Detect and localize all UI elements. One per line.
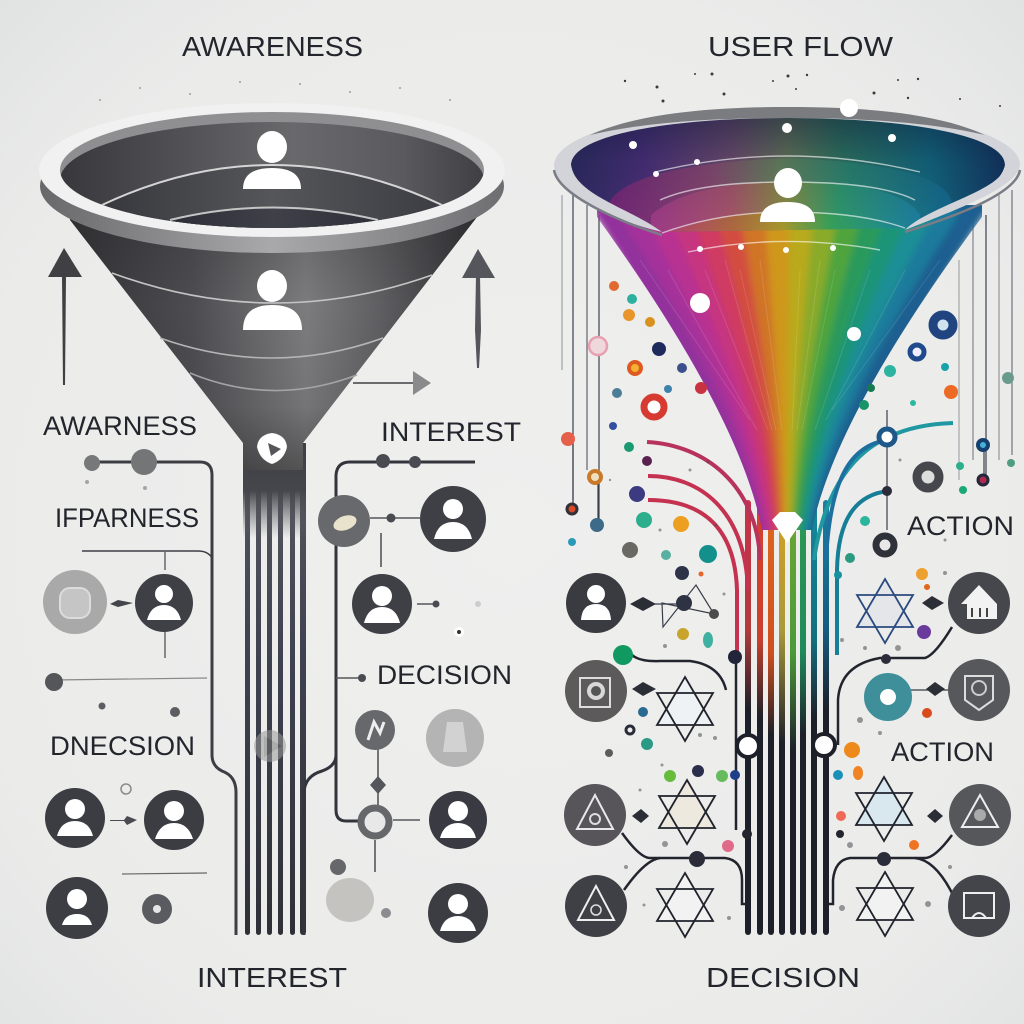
heading: user flow: USER FLOW xyxy=(708,31,894,62)
row 4 right: screen icon xyxy=(948,875,1010,937)
label: decision bottom: DECISION xyxy=(706,962,860,993)
node: person xyxy=(135,574,193,632)
label: interest upper: INTEREST xyxy=(381,417,521,447)
panel: rainbow funnel xyxy=(554,72,1020,935)
node: gray blob xyxy=(318,495,370,547)
small dot xyxy=(45,673,63,691)
row 1 right: house icon xyxy=(948,572,1010,634)
panel: grayscale funnel xyxy=(39,81,505,935)
connector nodes xyxy=(689,486,892,867)
speckles above funnel xyxy=(99,81,451,101)
arrow: right xyxy=(353,371,431,395)
black connectors xyxy=(622,627,952,904)
arrow: right up xyxy=(462,249,495,368)
coloured dots xyxy=(561,281,1015,852)
heading: awareness: AWARENESS xyxy=(182,31,363,62)
funnel mouth xyxy=(60,110,485,238)
white dots on funnel xyxy=(629,99,896,341)
cone ring lines xyxy=(112,273,432,391)
gray blobs xyxy=(326,859,391,922)
awareness nodes xyxy=(84,449,157,475)
label: awarness: AWARNESS xyxy=(43,411,197,441)
diamond xyxy=(370,776,386,794)
thin connectors xyxy=(573,410,984,690)
label: ifparness: IFPARNESS xyxy=(55,503,199,533)
neck stripes xyxy=(745,500,829,935)
white ring nodes on neck xyxy=(737,734,835,757)
row 4 left: triangle icon xyxy=(565,875,627,937)
label: dnecsion: DNECSION xyxy=(50,731,195,761)
panel: right flow nodes xyxy=(561,281,1015,937)
row 3 left: triangle icon xyxy=(564,784,626,846)
rainbow cone xyxy=(597,205,982,530)
arrow: left up xyxy=(48,248,82,385)
node: light icon xyxy=(426,709,484,767)
node: person xyxy=(144,790,204,850)
node: person xyxy=(46,877,108,939)
icon: blurred play marker xyxy=(254,730,286,762)
connectors xyxy=(54,462,236,935)
row 3 right: star icon xyxy=(949,784,1011,846)
small ring markers xyxy=(454,601,481,637)
small ring xyxy=(121,784,131,794)
funnel neck xyxy=(243,443,306,935)
cone fine ray lines xyxy=(640,260,940,430)
row 1 left: person icon xyxy=(566,573,626,633)
interest nodes xyxy=(358,454,440,682)
funnel cone xyxy=(70,215,477,470)
label: interest bottom: INTEREST xyxy=(197,962,347,993)
speckles above funnel xyxy=(624,72,1001,107)
node: person xyxy=(429,791,487,849)
ring node xyxy=(361,808,389,836)
small ring markers xyxy=(85,480,180,717)
node: person xyxy=(428,883,488,943)
star shapes xyxy=(657,579,913,937)
funnel rim xyxy=(39,103,505,253)
mouth and cone ring lines xyxy=(655,156,920,252)
tiny specks xyxy=(609,458,952,920)
panel: left flow nodes xyxy=(43,449,488,943)
icon: person in funnel xyxy=(760,168,815,222)
icon: person on cone xyxy=(243,270,302,330)
label: action lower: ACTION xyxy=(891,737,994,767)
icon: shield node xyxy=(257,433,287,464)
row 2 right: pin icon xyxy=(948,659,1010,721)
node: person xyxy=(420,486,486,552)
ring markers xyxy=(567,315,988,734)
arrow between nodes xyxy=(110,816,137,825)
node: person xyxy=(352,574,412,634)
node: light icon circle xyxy=(43,570,107,634)
label: action upper: ACTION xyxy=(907,511,1014,541)
coloured curved flow lines xyxy=(647,423,953,657)
row 2 left: shield icon xyxy=(565,660,627,722)
gem marker xyxy=(772,512,803,543)
funnel mouth xyxy=(571,118,1005,232)
label: decision middle: DECISION xyxy=(377,660,512,690)
funnel rim xyxy=(554,107,1020,235)
node: small icon xyxy=(355,710,395,750)
dot marker xyxy=(142,894,172,924)
arrow between nodes xyxy=(110,600,133,607)
teal ring node xyxy=(872,681,904,713)
right connectors xyxy=(304,462,475,935)
icon: person in mouth xyxy=(243,131,301,189)
diamonds xyxy=(630,596,945,823)
hanging lines xyxy=(562,190,1012,520)
node: person xyxy=(45,788,105,848)
